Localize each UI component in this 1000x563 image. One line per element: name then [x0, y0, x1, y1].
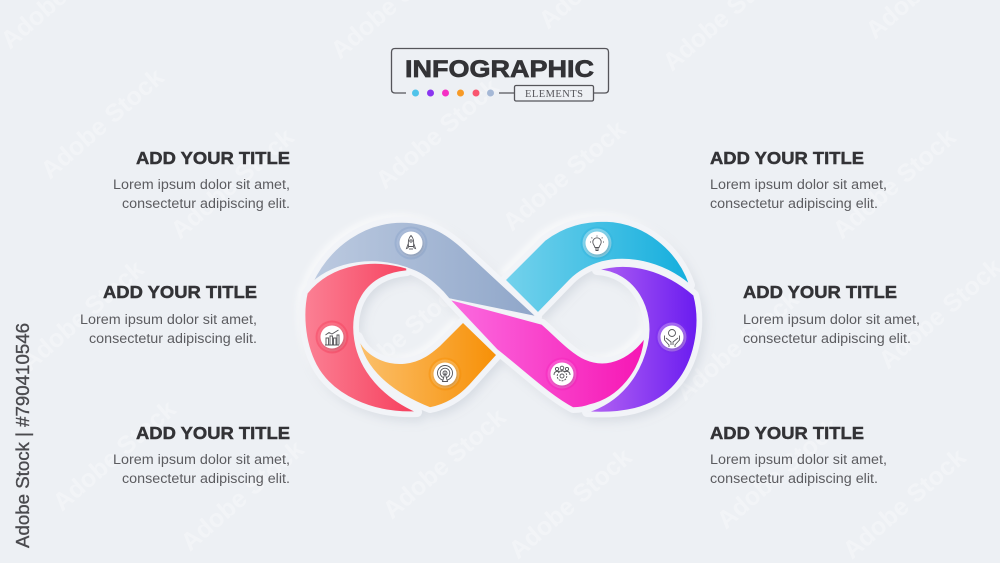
- node: hands and dollar: [656, 320, 688, 354]
- left text block 1: ADD YOUR TITLE: [136, 148, 290, 168]
- band: magenta: [449, 299, 645, 408]
- left text block 2: [80, 282, 257, 346]
- right text block 1: [710, 148, 887, 211]
- band: purple: [587, 266, 697, 412]
- left text block 1: Lorem ipsum dolor sit amet,: [113, 177, 290, 192]
- node: signal: [428, 358, 462, 390]
- header badge: [392, 48, 608, 101]
- watermark pattern: Adobe Stock: [16, 255, 149, 377]
- icon: team and gear: [554, 366, 570, 381]
- right text block 2: [743, 282, 920, 346]
- watermark pattern: Adobe Stock: [371, 73, 504, 195]
- right text block 2: consectetur adipiscing elit.: [743, 331, 911, 346]
- watermark pattern: Adobe Stock: [504, 443, 637, 563]
- right text block 3: Lorem ipsum dolor sit amet,: [710, 452, 887, 467]
- watermark pattern: Adobe Stock: [498, 115, 631, 237]
- node: bulb: [580, 226, 614, 260]
- icon: light bulb: [590, 236, 604, 250]
- stock id vertical text: Adobe Stock | #790410546: [12, 323, 33, 548]
- right text block 1: ADD YOUR TITLE: [710, 148, 864, 168]
- watermark pattern: Adobe Stock: [36, 63, 169, 185]
- icon: hands and dollar: [664, 330, 680, 347]
- watermark pattern: Adobe Stock: [176, 435, 309, 557]
- left text block 3: Lorem ipsum dolor sit amet,: [113, 452, 290, 467]
- node: team: [546, 358, 578, 390]
- band: red: [305, 263, 417, 412]
- node: rocket: [394, 226, 428, 260]
- band: gray: [312, 222, 537, 317]
- icon: signal tower: [438, 366, 452, 382]
- infinity diagram: [305, 221, 697, 412]
- watermark pattern: Adobe Stock: [166, 123, 299, 245]
- left text block 2: consectetur adipiscing elit.: [89, 331, 257, 346]
- left text block 1: consectetur adipiscing elit.: [122, 196, 290, 211]
- right text block 1: Lorem ipsum dolor sit amet,: [710, 177, 887, 192]
- watermark pattern: Adobe Stock: [378, 403, 511, 525]
- right text block 2: ADD YOUR TITLE: [743, 282, 897, 302]
- left text block 1: [113, 148, 290, 211]
- band: orange: [358, 322, 497, 408]
- neumorphic halo: [305, 221, 697, 412]
- elements label: ELEMENTS: [525, 89, 583, 100]
- watermark pattern: Adobe Stock: [48, 395, 181, 517]
- left text block 3: consectetur adipiscing elit.: [122, 471, 290, 486]
- watermark pattern: Adobe Stock: [838, 443, 971, 563]
- colour dots: [412, 90, 494, 96]
- watermark pattern: Adobe Stock: [336, 275, 469, 397]
- node: chart: [316, 320, 348, 354]
- right text block 3: consectetur adipiscing elit.: [710, 471, 878, 486]
- header frame: [392, 48, 608, 93]
- left text block 2: Lorem ipsum dolor sit amet,: [80, 312, 257, 327]
- left text block 2: ADD YOUR TITLE: [103, 282, 257, 302]
- right text block 3: ADD YOUR TITLE: [710, 423, 864, 443]
- right text block 2: Lorem ipsum dolor sit amet,: [743, 312, 920, 327]
- icon: rocket: [406, 236, 416, 250]
- right text block 3: [710, 423, 887, 486]
- left text block 3: ADD YOUR TITLE: [136, 423, 290, 443]
- band: blue: [505, 221, 690, 313]
- left text block 3: [113, 423, 290, 486]
- heading: INFOGRAPHIC: INFOGRAPHIC: [405, 56, 594, 83]
- icon: bar chart: [325, 330, 339, 345]
- watermark pattern: Adobe Stock: [828, 123, 961, 245]
- watermark pattern: Adobe Stock: [712, 413, 845, 535]
- right text block 1: consectetur adipiscing elit.: [710, 196, 878, 211]
- elements label: [514, 86, 594, 101]
- watermark pattern: Adobe Stock: [671, 285, 804, 407]
